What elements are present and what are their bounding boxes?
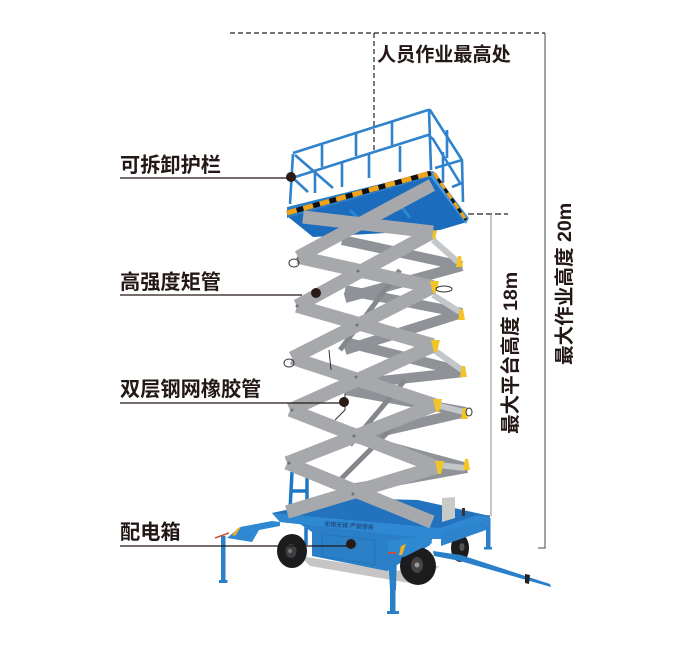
dimension: top dashed line bbox=[230, 32, 545, 34]
control box bbox=[442, 497, 465, 522]
top and mid rails bbox=[293, 110, 463, 202]
cable loops bbox=[284, 259, 472, 420]
callout: torque tube: 高强度矩管 bbox=[120, 270, 221, 294]
hydraulic cylinders bbox=[335, 240, 465, 485]
dimension: platform height line bbox=[490, 214, 492, 516]
front wheel bbox=[400, 547, 436, 585]
hazard stripes bbox=[287, 173, 431, 213]
front posts bbox=[290, 110, 431, 204]
label: working height top: 人员作业最高处 bbox=[377, 43, 511, 66]
callout: torque tube bbox=[120, 270, 321, 298]
diagonal braces bbox=[293, 155, 333, 192]
callout: removable guard rail bbox=[120, 154, 296, 182]
callout: removable guard rail: 可拆卸护栏 bbox=[120, 154, 221, 177]
callout: electrical box bbox=[120, 521, 356, 549]
chassis front box bbox=[300, 524, 433, 571]
callout: rubber hose: 双层钢网橡胶管 bbox=[120, 377, 261, 401]
front outrigger bbox=[387, 536, 432, 614]
rear wheels bbox=[451, 534, 469, 562]
callout: rubber hose bbox=[120, 377, 349, 407]
scissor arms: front set bbox=[287, 232, 437, 522]
scissor pivots bbox=[288, 256, 360, 496]
tow bar bbox=[433, 551, 551, 587]
dimension: overall height line bbox=[538, 33, 545, 548]
dimension: platform level dashes bbox=[468, 213, 508, 215]
dimension: dashed line to platform rail bbox=[373, 33, 375, 150]
rear outrigger leg bbox=[476, 516, 492, 550]
side posts bbox=[435, 130, 462, 187]
left wheel bbox=[277, 534, 307, 568]
chassis bbox=[272, 498, 490, 571]
chassis top strip bbox=[272, 513, 490, 539]
scissor arms under platform bbox=[298, 185, 433, 257]
label: max platform height: 最大平台高度 18m bbox=[499, 272, 522, 434]
yellow hinge brackets bbox=[429, 227, 470, 474]
icon: scissor lift machine bbox=[215, 110, 551, 614]
callout: electrical box: 配电箱 bbox=[120, 521, 181, 544]
platform floor bbox=[287, 174, 467, 237]
platform bbox=[287, 171, 469, 237]
ground shadow bbox=[300, 556, 440, 584]
chassis deck bbox=[272, 498, 490, 538]
left outrigger bbox=[215, 521, 280, 583]
label: max working height: 最大作业高度 20m bbox=[553, 203, 576, 365]
scissor arms: back set bbox=[342, 240, 467, 490]
platform guard rails bbox=[290, 110, 463, 204]
rear stand bbox=[290, 472, 307, 545]
warning text on chassis: 无锡无锡 严禁使用 bbox=[324, 520, 374, 531]
